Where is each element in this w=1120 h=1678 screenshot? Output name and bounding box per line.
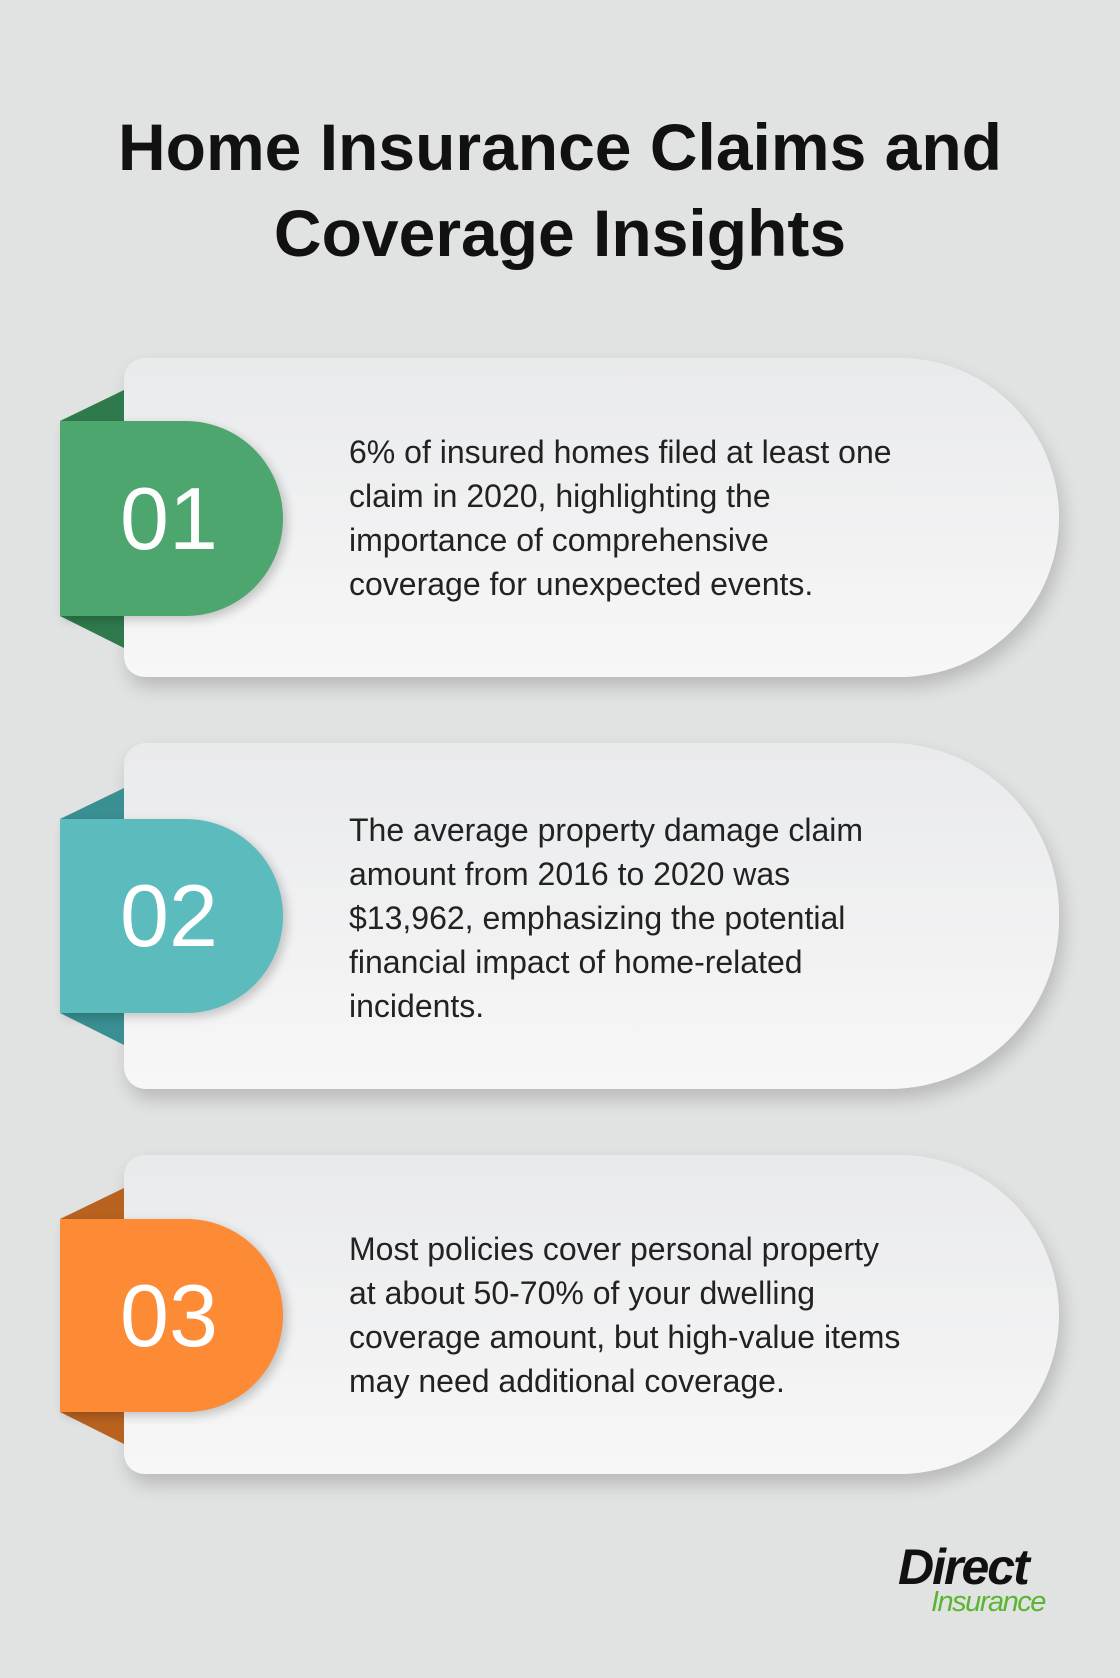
logo: Direct (898, 1539, 1028, 1595)
tab: 02: 02 (120, 866, 218, 965)
text: card 2: amount from 2016 to 2020 was (349, 856, 790, 892)
logo: Insurance (931, 1586, 1045, 1618)
text: card 2: The average property damage claim (349, 812, 863, 848)
text: card 3: may need additional coverage. (349, 1363, 785, 1399)
text: card 1: importance of comprehensive (349, 522, 769, 558)
text: card 1 (349, 434, 892, 602)
panel: card 2 (124, 743, 1059, 1089)
title: Coverage Insights (274, 196, 846, 270)
text: card 2: financial impact of home-related (349, 944, 803, 980)
fold: card 3 (60, 1188, 124, 1444)
fold: card 2 (60, 788, 124, 1045)
text: card 3: at about 50-70% of your dwelling (349, 1275, 815, 1311)
tab: 03: 03 (120, 1266, 218, 1364)
logo (898, 1539, 1046, 1618)
tab: 02 (60, 819, 283, 1013)
text: card 3 (349, 1231, 900, 1399)
text: card 2: $13,962, emphasizing the potential (349, 900, 845, 936)
text: card 1: claim in 2020, highlighting the (349, 478, 771, 514)
text: card 3: Most policies cover personal property (349, 1231, 879, 1267)
title (118, 110, 1002, 270)
fold: card 1 (60, 390, 124, 648)
panel: card 1 (124, 358, 1059, 677)
panel: card 3 (124, 1155, 1059, 1474)
tab: 03 (60, 1219, 283, 1412)
text: card 2 (349, 812, 863, 1024)
title: Home Insurance Claims and (118, 110, 1002, 184)
tab: 01 (60, 421, 283, 616)
tab: 01: 01 (120, 468, 218, 568)
text: card 2: incidents. (349, 988, 484, 1024)
text: card 3: coverage amount, but high-value items (349, 1319, 900, 1355)
text: card 1: coverage for unexpected events. (349, 566, 813, 602)
text: card 1: 6% of insured homes filed at least one (349, 434, 892, 470)
